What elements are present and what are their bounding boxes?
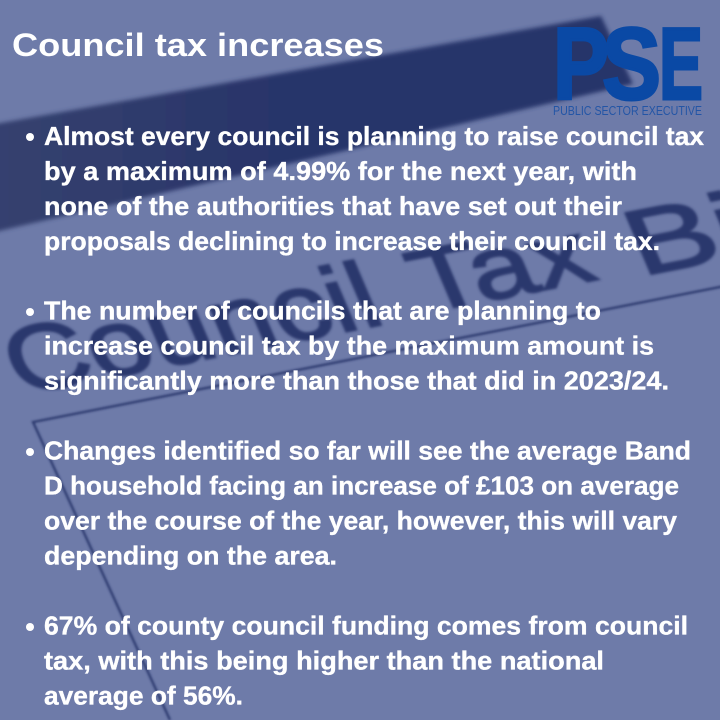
- logo: PSE Public Sector Executive: P: [553, 7, 609, 121]
- bullet point: maximum rise: proposals declining to increase their council tax.: [44, 226, 660, 256]
- background: blurred council tax bill photo: Tax: [393, 204, 608, 332]
- logo: PSE Public Sector Executive: S: [602, 7, 661, 121]
- logo: PSE Public Sector Executive: [553, 7, 703, 121]
- bullet point: maximum rise: by a maximum of 4.99% for the next year, with: [44, 156, 637, 186]
- bullet point: number of councils: The number of councils that are planning to: [44, 296, 601, 326]
- bullet point: county council funding: [26, 610, 688, 710]
- bullet point: Band D increase: Changes identified so far will see the average Band: [44, 436, 691, 466]
- bullet point: maximum rise: none of the authorities that have set out their: [44, 191, 622, 221]
- bullet point: Band D increase: [26, 436, 691, 570]
- bullet point: number of councils: significantly more than those that did in 2023/24.: [44, 366, 669, 396]
- bullet point: maximum rise: Almost every council is planning to raise council tax: [44, 121, 705, 151]
- bullet point: county council funding: 67% of county council funding comes from council: [44, 610, 688, 640]
- bullet point: county council funding: average of 56%.: [44, 680, 243, 710]
- bullet point: number of councils: increase council tax by the maximum amount is: [44, 330, 654, 360]
- bullet point: Band D increase: D household facing an increase of £103 on average: [44, 470, 679, 500]
- bullet point: county council funding: tax, with this being higher than the national: [44, 646, 604, 676]
- bullet point: number of councils: [26, 296, 669, 396]
- bullet point: Band D increase: depending on the area.: [44, 540, 337, 570]
- title: Council tax increases: [12, 27, 384, 63]
- bullet point: Band D increase: over the course of the year, however, this will vary: [44, 506, 678, 536]
- bullet point: maximum rise: [26, 121, 705, 256]
